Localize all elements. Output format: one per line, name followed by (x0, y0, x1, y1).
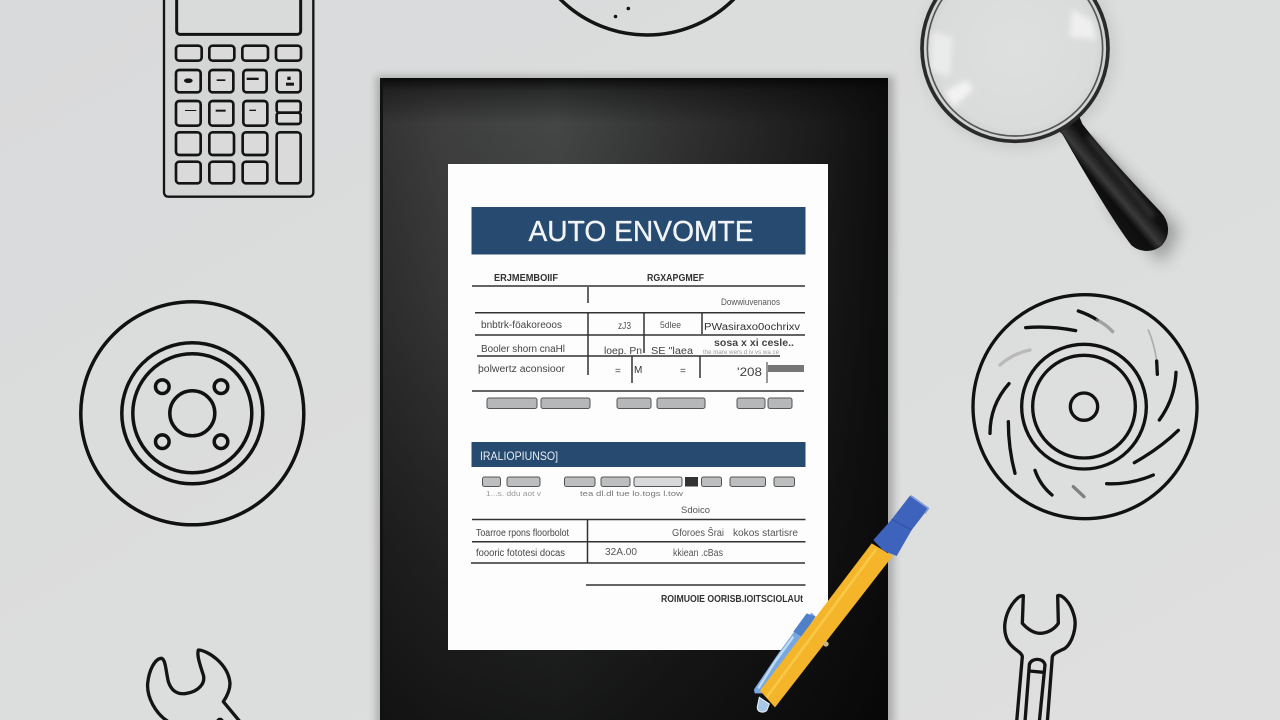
table: totals: Gforoes Ŝrai (672, 526, 724, 539)
panel: black clipboard frame (376, 76, 894, 720)
table: totals: Sdoico (681, 505, 710, 515)
table: estimate rows: sosa x xi cesle.. (714, 338, 794, 349)
table: totals: kokos startisre (733, 528, 798, 539)
table: estimate rows: zJ3 (618, 321, 631, 332)
header bar: auto envomte: AUTO ENVOMTE (528, 216, 754, 248)
icon: wrench left (148, 650, 240, 720)
icon: magnifying glass (922, 0, 1180, 263)
table: estimate rows: ERJMEMBOIIF (494, 272, 559, 284)
table: totals: tea dl.dl tue lo.togs l.tow (580, 489, 684, 498)
section bar: IRALIOPIUNSO] (480, 449, 558, 463)
row of grey buttons (487, 398, 792, 408)
table: totals: 32A.00 (605, 547, 637, 558)
icon: wrench right (1005, 596, 1075, 720)
table: estimate rows: = (615, 366, 621, 377)
table: estimate rows: M (634, 365, 642, 376)
table: estimate rows: = (680, 366, 686, 377)
table: totals: 1...s. ddu aot v (486, 489, 541, 498)
table: estimate rows: loep. Pn (604, 346, 642, 357)
second row of grey buttons (482, 477, 794, 486)
section bar (472, 442, 806, 467)
icon: calculator (164, 0, 313, 197)
panel: document (448, 164, 828, 650)
table: totals: Toarroe rpons floorbolot (476, 528, 569, 539)
icon: plain brake disc (81, 302, 304, 525)
table: estimate rows: bnbtrk-föakoreoos (481, 320, 562, 331)
table: estimate rows: 5dlee (660, 320, 681, 330)
table: estimate rows (472, 272, 805, 391)
header bar: auto envomte (472, 207, 806, 254)
icon: top circle (524, 0, 770, 35)
table: estimate rows: RGXAPGMEF (647, 272, 704, 284)
table: totals: kkiean .cBas (673, 548, 723, 559)
table: totals (471, 489, 806, 605)
icon: yellow pen (754, 496, 928, 712)
table: estimate rows: þolwertz aconsioor (478, 364, 566, 375)
table: estimate rows: Dowwiuvenanos (721, 297, 780, 307)
table: totals: foooric fototesi docas (476, 548, 565, 559)
table: totals: ROIMUOIE OORISB.IOITSCIOLAUt (661, 593, 803, 605)
table: estimate rows: PWasiraxo0ochrixv (704, 322, 800, 333)
table: estimate rows: Booler shorn cnaHl (481, 344, 565, 355)
paper sheet (448, 164, 828, 650)
icon: vented brake disc (973, 295, 1197, 519)
table: estimate rows: '208 (737, 365, 762, 379)
table: estimate rows: SE "laea (651, 346, 693, 357)
table: estimate rows: the mare wers d iv vs wa ce (703, 350, 780, 356)
